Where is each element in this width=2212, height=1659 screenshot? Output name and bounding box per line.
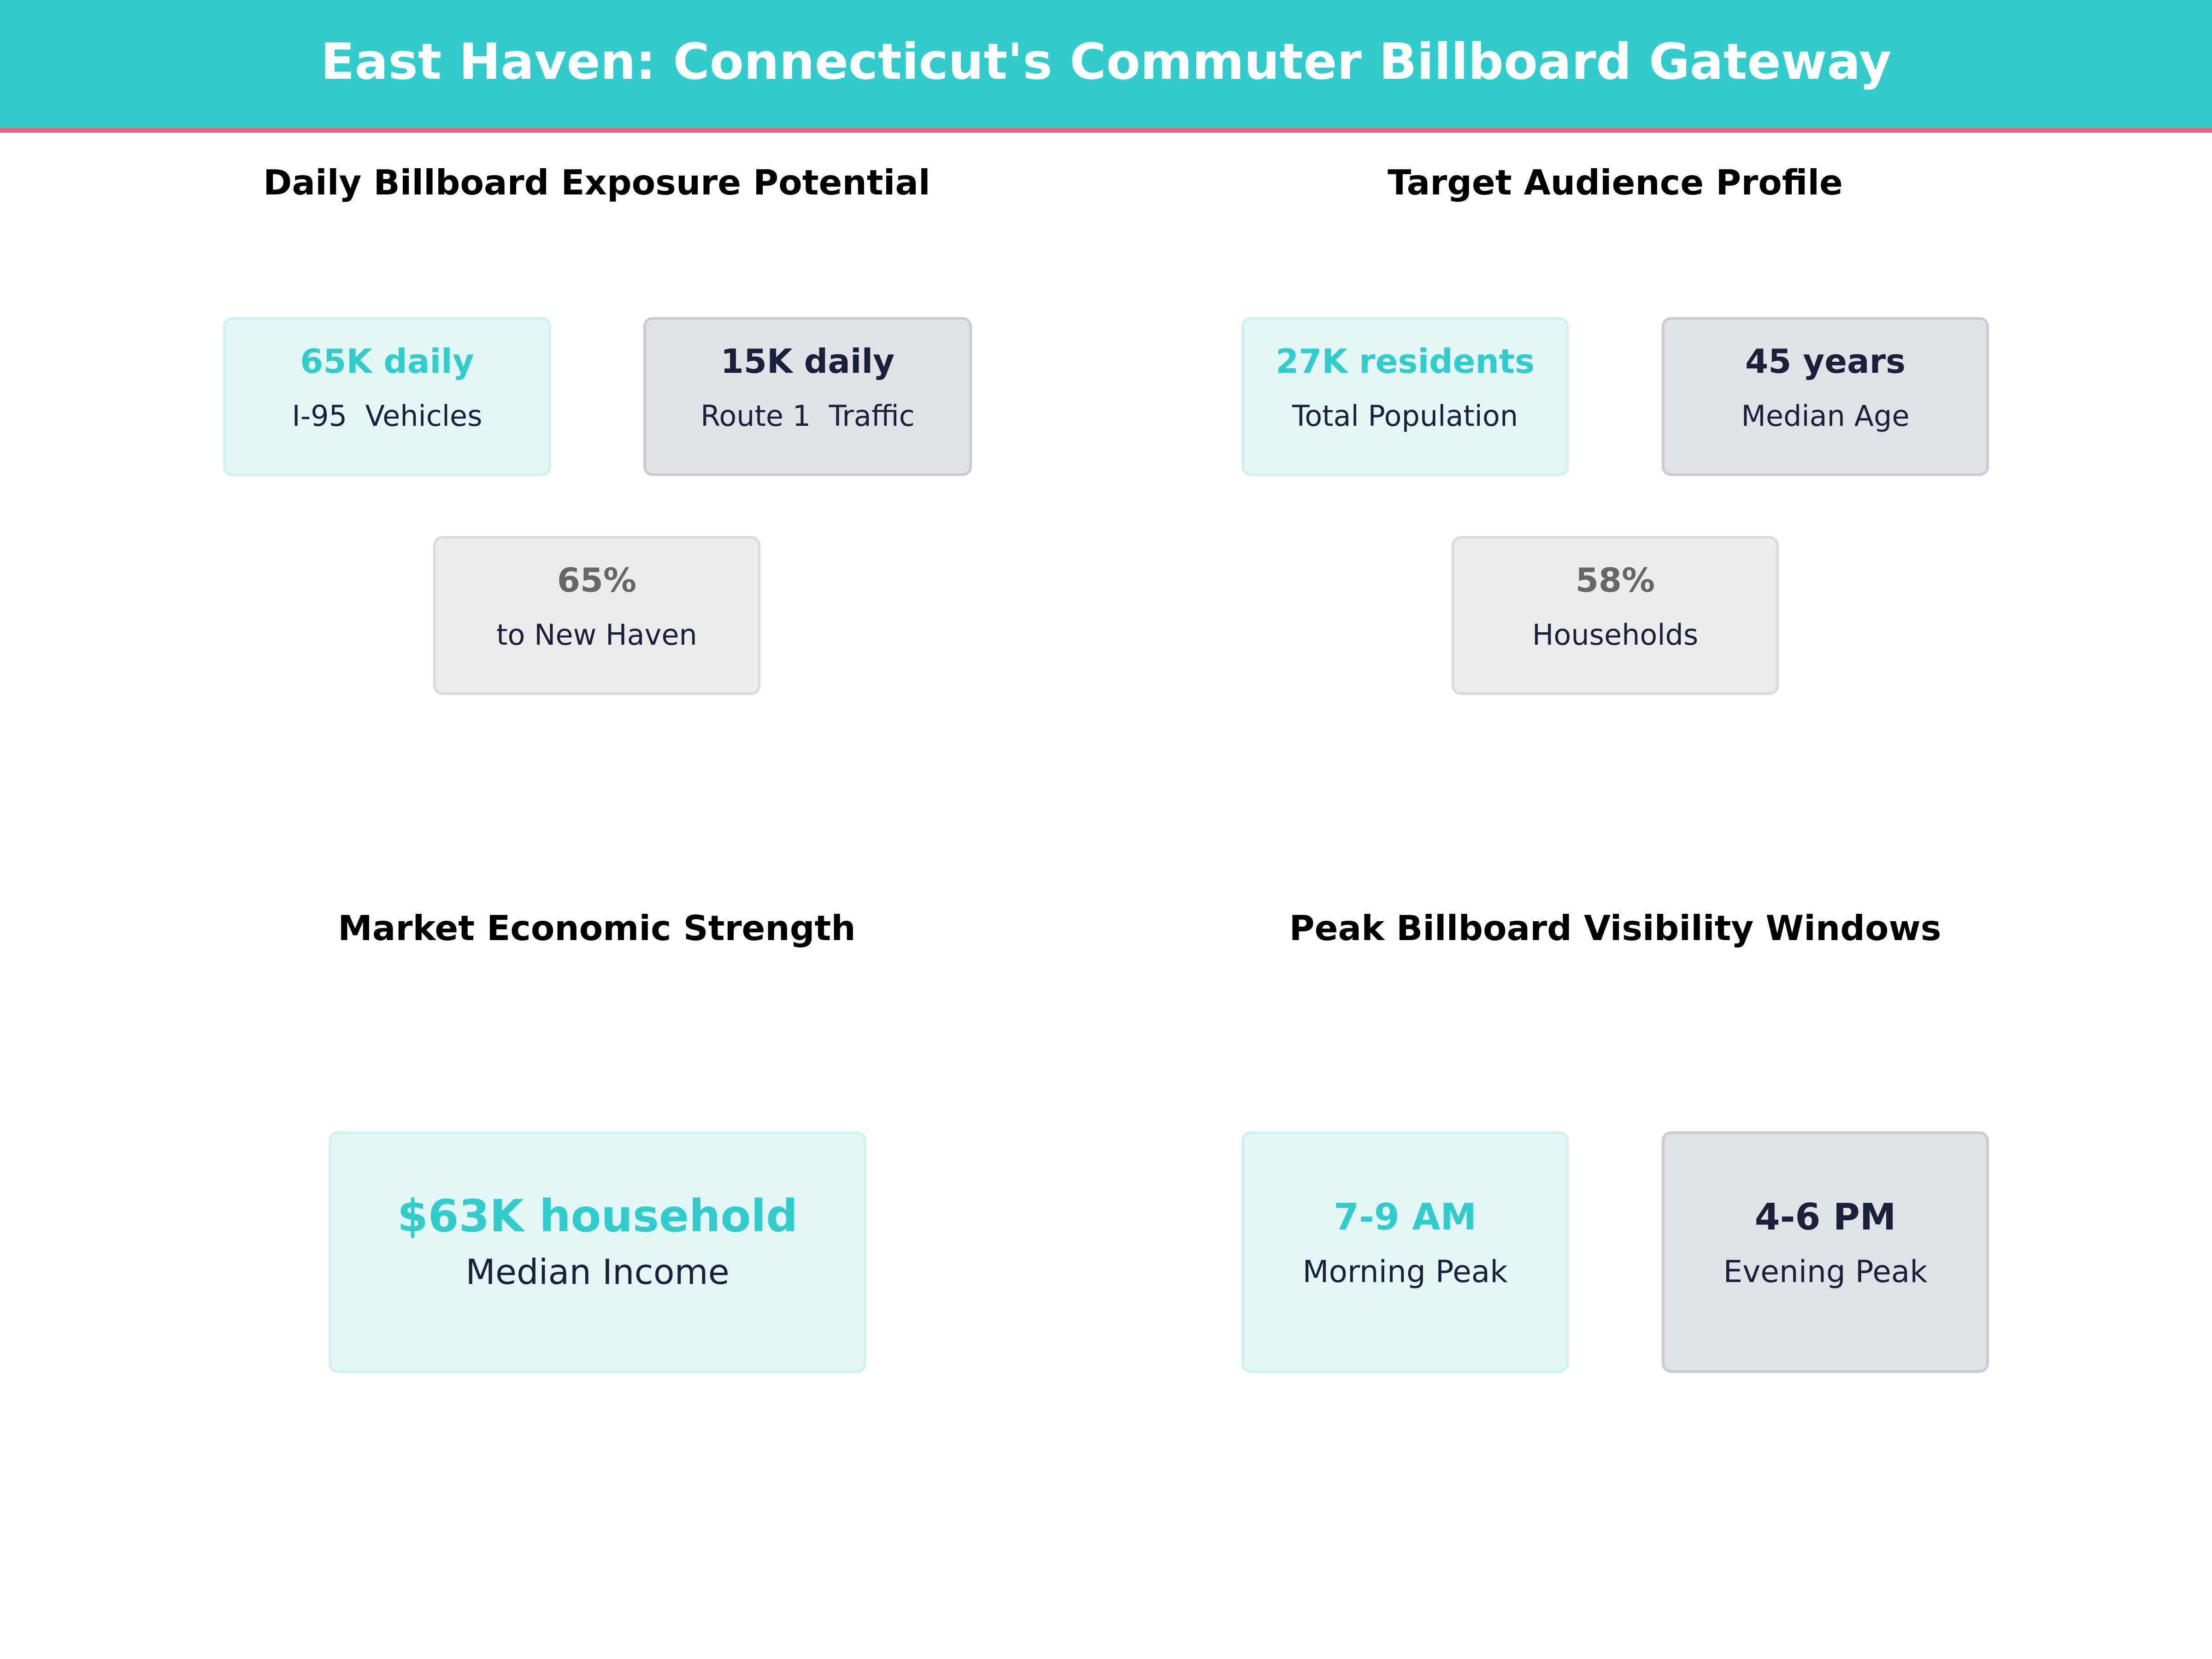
- card: median age: 45 years: [1745, 342, 1906, 381]
- heading: exposure: Daily Billboard Exposure Potential: [263, 162, 930, 203]
- card: median age: [1662, 317, 1989, 476]
- header banner: [0, 0, 2212, 133]
- card: evening peak: [1662, 1131, 1989, 1373]
- card: New Haven: 65%: [557, 561, 636, 600]
- card: income: Median Income: [465, 1252, 729, 1292]
- card: population: [1241, 317, 1569, 476]
- card: evening peak: 4-6 PM: [1755, 1196, 1896, 1238]
- card: Route 1: Route 1 Traffic: [700, 399, 915, 433]
- card: Route 1: [643, 317, 972, 476]
- card: households: 58%: [1576, 561, 1655, 600]
- card: households: Households: [1532, 618, 1698, 652]
- card: households: [1452, 536, 1779, 695]
- card: income: $63K household: [397, 1190, 798, 1242]
- card: I-95: 65K daily: [300, 342, 474, 381]
- heading: audience: Target Audience Profile: [1388, 162, 1843, 203]
- title: East Haven: Connecticut's Commuter Billboard Gateway: [321, 33, 1891, 91]
- card: morning peak: 7-9 AM: [1334, 1196, 1477, 1238]
- card: Route 1: 15K daily: [721, 342, 894, 381]
- card: New Haven: [433, 536, 760, 695]
- card: I-95: [223, 317, 551, 476]
- card: income: [329, 1131, 866, 1373]
- card: morning peak: [1241, 1131, 1569, 1373]
- heading: economic: Market Economic Strength: [338, 908, 856, 948]
- card: morning peak: Morning Peak: [1303, 1254, 1507, 1289]
- card: median age: Median Age: [1741, 399, 1910, 433]
- card: evening peak: Evening Peak: [1724, 1254, 1927, 1289]
- card: population: Total Population: [1292, 399, 1518, 433]
- card: population: 27K residents: [1276, 342, 1535, 381]
- card: New Haven: to New Haven: [496, 618, 697, 652]
- card: I-95: I-95 Vehicles: [292, 399, 482, 433]
- heading: peak: Peak Billboard Visibility Windows: [1289, 908, 1941, 948]
